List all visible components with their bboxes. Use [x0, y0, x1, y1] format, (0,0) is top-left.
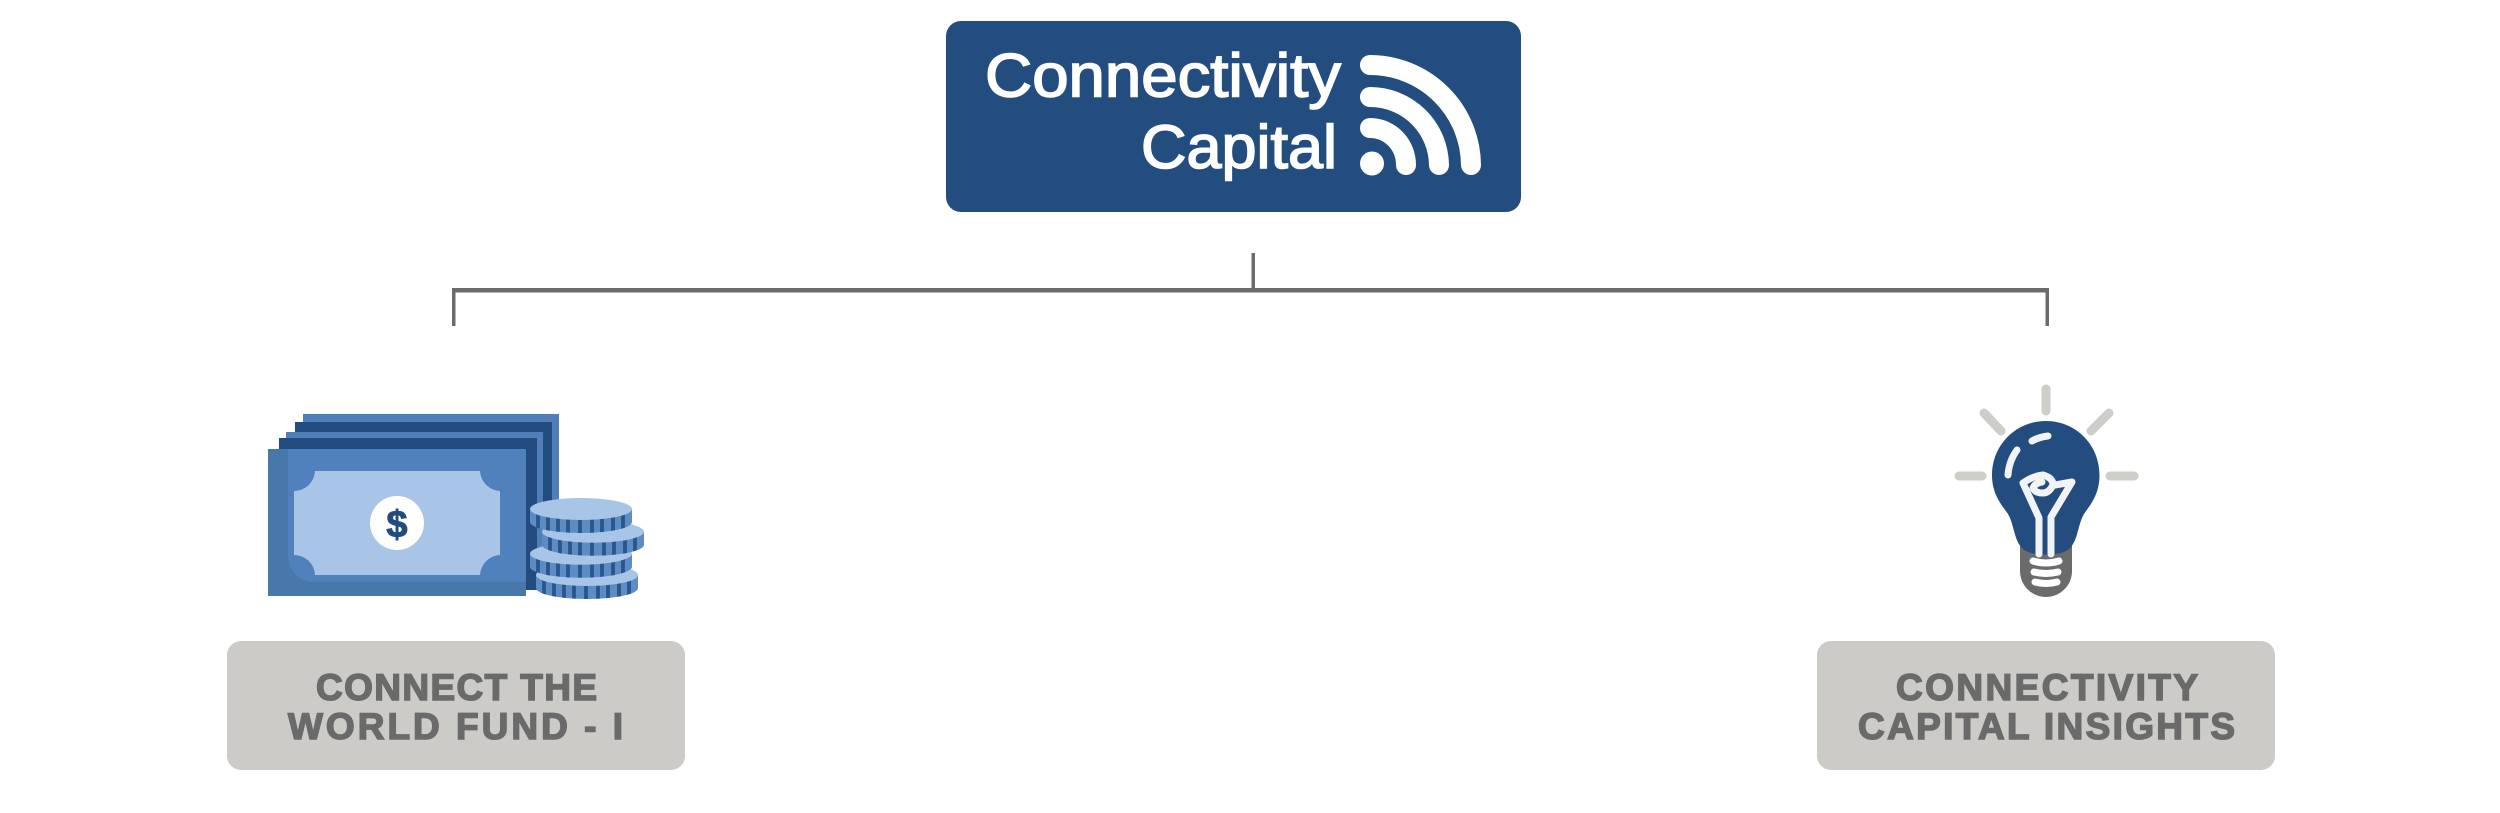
- highlights: [2008, 436, 2048, 475]
- icon: light bulb: [1959, 389, 2134, 597]
- filament: [2023, 475, 2072, 554]
- front banknote: $: [386, 504, 408, 546]
- logo text: Capital: [1141, 113, 1337, 181]
- label: Connect the World Fund - I: CONNECT THE: [316, 667, 597, 708]
- connector lines: [452, 253, 2049, 326]
- stacked banknotes: [279, 414, 559, 590]
- icon: banknotes and coins: [268, 414, 644, 605]
- bulb glass: [1992, 421, 2100, 555]
- logo text: [985, 42, 1342, 181]
- logo text: Connectivity: [985, 42, 1342, 110]
- label: Connectivity Capital Insights: [1817, 641, 2275, 770]
- logo panel: Connectivity Capital: [946, 21, 1521, 212]
- label: Connectivity Capital Insights: CAPITAL INSIGHTS: [1858, 706, 2235, 747]
- label: Connectivity Capital Insights: CONNECTIVITY: [1896, 667, 2198, 708]
- icon: wifi signal: [1360, 65, 1471, 176]
- label: Connect the World Fund - I: [227, 641, 685, 770]
- front banknote: [268, 449, 526, 596]
- bulb base: [2020, 530, 2072, 597]
- label: Connect the World Fund - I: WORLD FUND - I: [288, 706, 623, 747]
- coin stack: [530, 498, 644, 605]
- rays: [1959, 389, 2134, 476]
